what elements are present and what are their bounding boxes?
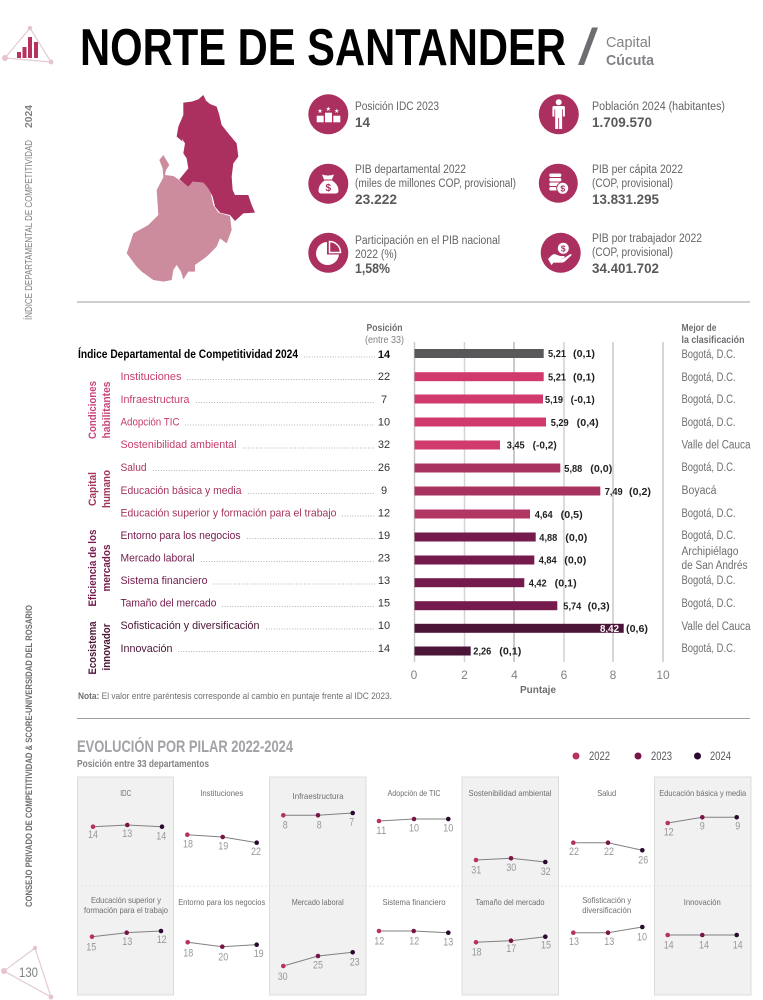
small multiple: Sofisticación y diversificación (569, 895, 647, 948)
row: Sistema financiero (120, 575, 390, 587)
small multiple: Salud (569, 788, 648, 866)
group label: Condiciones habilitantes (87, 381, 113, 439)
stat: PIB departamental: (miles de millones COP, provisional) (355, 178, 516, 190)
bar: Educación superior 4,64: 4,64 (535, 510, 553, 521)
icon: hand with coin: $ (561, 244, 566, 254)
row: Innovación: Innovación (120, 643, 172, 655)
bar: Mercado laboral 4,84: 4,84 (539, 556, 557, 566)
row: Sofisticación y diversificación (120, 620, 390, 632)
stat: PIB per cápita: 13.831.295 (592, 191, 659, 207)
bar: Sofisticación y diversificación 8,42: (0,6) (626, 624, 648, 635)
stat: Posición IDC 2023 (308, 94, 439, 134)
stat: Participación en el PIB nacional: 1,58% (355, 260, 390, 276)
legend: 2023 (651, 751, 672, 763)
row: Sofisticación y diversificación: Sofisticación y diversificación (120, 620, 260, 632)
bar: Infraestructura 5,19 (414, 394, 595, 406)
small multiple: Tamaño del mercado: Tamaño del mercado (476, 897, 545, 907)
small multiple: Adopción de TIC: 11 (376, 825, 386, 837)
small multiple: Educación básica y media: 12 (664, 826, 674, 838)
stat: PIB por trabajador: (COP, provisional) (592, 247, 673, 259)
small multiple: Educación básica y media (659, 788, 746, 838)
bar: Salud 5,88 (414, 464, 612, 475)
row: Educación superior y formación para el trabajo: Educación superior y formación para el trabajo (120, 508, 336, 520)
row: Instituciones (120, 371, 390, 383)
small multiple: IDC: 13 (122, 828, 132, 840)
row: Mercado laboral (120, 552, 390, 564)
small multiple: Innovación (664, 897, 743, 951)
bar: Sistema financiero 4,42: 4,42 (529, 578, 547, 590)
axis labels: 0 (411, 668, 418, 682)
bar: Infraestructura 5,19: (-0,1) (571, 395, 595, 406)
bar: Educación básica y media 7,49 (414, 486, 651, 498)
capital (606, 34, 655, 69)
bar: Educación básica y media 7,49: (0,2) (629, 487, 651, 498)
bar: Instituciones 5,21: (0,1) (573, 372, 595, 384)
bar: Innovación 2,26: 2,26 (473, 646, 492, 658)
axis labels (411, 668, 670, 682)
group label: Eficiencia de los mercados: Eficiencia de los (87, 530, 99, 606)
small multiple: Educación superior y formación para el trabajo: formación para el trabajo (84, 905, 168, 915)
column: mejor de la clasificación (682, 323, 751, 655)
group label: Ecosistema innovador: innovador (101, 623, 113, 670)
row: Índice Departamental de Competitividad: 14 (378, 349, 391, 361)
sidebar: publisher: CONSEJO PRIVADO DE COMPETITIVIDAD & SCORE-UNIVERSIDAD DEL ROSARIO (24, 605, 35, 907)
axis labels: 8 (610, 668, 617, 682)
small multiple: Mercado laboral (278, 897, 360, 983)
bar: Salud 5,88: (0,0) (590, 464, 612, 475)
small multiple: Sostenibilidad ambiental: 31 (471, 864, 481, 876)
small multiple: Entorno para los negocios: Entorno para los negocios (178, 897, 265, 907)
small multiple: Tamaño del mercado: 15 (541, 939, 551, 951)
stat: PIB per cápita: PIB per cápita 2022 (592, 164, 683, 176)
stat: PIB departamental: 23.222 (355, 191, 397, 207)
column: mejor de la clasificación: Boyacá (682, 485, 717, 497)
stat: Participación en el PIB nacional (308, 233, 500, 276)
column: mejor de la clasificación: Bogotá, D.C. (682, 462, 736, 474)
small multiple: Adopción de TIC (376, 788, 453, 837)
column: mejor de la clasificación: Bogotá, D.C. (682, 394, 736, 406)
bar: IDC 5,21: (0,1) (573, 349, 595, 360)
bar: Entorno para los negocios 4,88: 4,88 (539, 533, 558, 544)
bar: Sostenibilidad ambiental 3,45 (414, 440, 557, 452)
small multiple: Mercado laboral: Mercado laboral (292, 897, 344, 907)
small multiple: Educación superior y formación para el trabajo: 13 (122, 936, 132, 948)
row: Tamaño del mercado: Tamaño del mercado (120, 598, 216, 610)
bar: Mercado laboral 4,84: (0,0) (564, 556, 586, 566)
stat: Población 2024 (539, 94, 725, 134)
map: department location (127, 95, 255, 282)
small multiple: Sistema financiero: Sistema financiero (382, 897, 446, 907)
small multiple: Innovación: 14 (733, 939, 743, 951)
bar: Innovación 2,26 (414, 646, 521, 658)
row: Índice Departamental de Competitividad: Índice Departamental de Competitividad 2024 (78, 348, 299, 361)
small multiple: Infraestructura: 8 (283, 819, 288, 831)
bar: Sistema financiero 4,42: (0,1) (555, 578, 577, 590)
small multiple: Instituciones: 18 (183, 839, 193, 851)
column: mejor de la clasificación: Bogotá, D.C. (682, 643, 736, 655)
bar: Educación superior 4,64: (0,5) (561, 510, 583, 521)
stat: PIB departamental: PIB departamental 2022 (355, 164, 466, 176)
small multiple: Educación superior y formación para el trabajo: Educación superior y (91, 895, 162, 905)
bar: Innovación 2,26: (0,1) (499, 646, 521, 658)
small multiple: Sostenibilidad ambiental: Sostenibilidad ambiental (468, 788, 552, 798)
bar: Entorno para los negocios 4,88: (0,0) (565, 533, 587, 544)
small multiple: Sofisticación y diversificación: Sofisticación y (582, 895, 632, 905)
small multiple: Sistema financiero (374, 897, 453, 948)
icon: coins: $ (560, 184, 565, 194)
stat: Participación en el PIB nacional: 2022 (%) (355, 249, 397, 261)
bar: Educación básica y media 7,49: 7,49 (605, 487, 623, 498)
column heading: Posición: (entre 33) (365, 335, 404, 346)
small multiple: Infraestructura: 8 (317, 819, 322, 831)
icon: coins (539, 164, 578, 203)
row: Instituciones: 22 (378, 371, 390, 383)
small multiple: Instituciones: 22 (251, 846, 261, 858)
stat: Posición IDC 2023: 14 (355, 114, 370, 130)
stat: PIB por trabajador: 34.401.702 (592, 260, 659, 276)
bar: Sistema financiero 4,42 (414, 578, 577, 590)
stat: Población 2024: 1.709.570 (592, 114, 652, 130)
small multiple: Instituciones: 19 (218, 841, 228, 853)
axis labels: 4 (511, 668, 518, 682)
row: Infraestructura: 7 (381, 394, 387, 406)
bar chart: puntaje por pilar (411, 342, 670, 696)
column: mejor de la clasificación: Bogotá, D.C. (682, 349, 736, 361)
small multiple: Mercado laboral: 25 (313, 960, 323, 972)
legend: 2022 (589, 751, 610, 763)
row: Entorno para los negocios: 19 (378, 530, 390, 542)
icon: person (539, 94, 579, 134)
small multiple: Educación básica y media: 9 (700, 821, 705, 833)
group label: Condiciones habilitantes: habilitantes (101, 382, 113, 438)
bar: Tamaño del mercado 5,74: (0,3) (588, 602, 610, 612)
bar: Infraestructura 5,19: 5,19 (545, 395, 563, 406)
row: Salud: Salud (120, 462, 146, 474)
column: mejor de la clasificación: Bogotá, D.C. (682, 372, 736, 384)
icon: podium (308, 94, 348, 134)
small multiple: Sofisticación y diversificación: diversificación (582, 905, 631, 915)
small multiple: Tamaño del mercado (472, 897, 551, 959)
column heading: Posición (365, 323, 404, 346)
small multiple: Instituciones: Instituciones (200, 788, 243, 798)
axis labels: 10 (656, 668, 670, 682)
bar: Adopción TIC 5,29: 5,29 (551, 418, 569, 429)
group label: Eficiencia de los mercados (87, 530, 113, 606)
row: Tamaño del mercado: 15 (378, 598, 390, 610)
sidebar: index name and year: 2024 (24, 105, 35, 128)
icon: hand with coin (541, 233, 581, 273)
bar: Mercado laboral 4,84 (414, 556, 586, 566)
bar: Sofisticación y diversificación 8,42: 8,42 (600, 624, 619, 635)
panel: ranking table (78, 323, 404, 674)
row: Sistema financiero: Sistema financiero (120, 575, 208, 587)
bar: IDC 5,21 (414, 349, 595, 360)
legend (572, 751, 731, 763)
page number triangle (1, 946, 53, 999)
bar: Instituciones 5,21: 5,21 (548, 372, 566, 384)
column: mejor de la clasificación: Bogotá, D.C. (682, 530, 736, 542)
bar: Adopción TIC 5,29: (0,4) (577, 418, 599, 429)
row: Sostenibilidad ambiental: Sostenibilidad ambiental (120, 439, 236, 451)
icon: logo triangle with bars (2, 26, 53, 64)
bar: Educación superior 4,64 (414, 510, 583, 521)
row: Sofisticación y diversificación: 10 (378, 620, 390, 632)
column: mejor de la clasificación: Archipiélago (682, 546, 738, 558)
row: Innovación (120, 643, 390, 655)
row: Educación básica y media (120, 485, 387, 497)
section heading: EVOLUCIÓN POR PILAR 2022-2024 (77, 737, 293, 756)
icon: pie chart (308, 233, 348, 273)
row: Entorno para los negocios (120, 530, 390, 542)
small multiple: Innovación: 14 (699, 939, 709, 951)
small multiple: Adopción de TIC: 10 (409, 823, 419, 835)
group label: Eficiencia de los mercados: mercados (101, 544, 113, 592)
small multiple: Sistema financiero: 12 (374, 935, 384, 947)
bar: Sofisticación y diversificación 8,42 (414, 624, 648, 635)
bar: Entorno para los negocios 4,88 (414, 532, 587, 544)
small multiple: Educación superior y formación para el trabajo (84, 895, 168, 954)
small multiple: Sistema financiero: 12 (409, 935, 419, 947)
small multiple: Sostenibilidad ambiental: 32 (541, 866, 551, 878)
stat: PIB per cápita: (COP, provisional) (592, 178, 673, 190)
axis labels: 2 (461, 668, 468, 682)
group label: Capital humano: humano (101, 470, 113, 508)
row: Salud (120, 462, 390, 474)
small multiple: Innovación: Innovación (684, 897, 721, 907)
map: neighbouring area (127, 155, 232, 282)
row: Mercado laboral: 23 (378, 552, 390, 564)
sidebar: index name and year: ÍNDICE DEPARTAMENTAL DE COMPETITIVIDAD (22, 140, 35, 320)
icon: money bag (308, 164, 348, 204)
row: Tamaño del mercado (120, 598, 390, 610)
small multiple: Educación básica y media: 9 (735, 821, 740, 833)
row: Instituciones: Instituciones (120, 371, 182, 383)
map: Norte de Santander (177, 95, 255, 221)
column: mejor de la clasificación: Bogotá, D.C. (682, 575, 736, 587)
bar: Tamaño del mercado 5,74: 5,74 (563, 602, 582, 612)
page number triangle: 130 (19, 964, 38, 980)
small multiple: Adopción de TIC: Adopción de TIC (388, 788, 440, 798)
small multiple: Sostenibilidad ambiental: 30 (506, 862, 516, 874)
note: Nota: El valor entre paréntesis corresponde al cambio en puntaje frente al IDC 2023. (78, 691, 392, 702)
small multiple: Sistema financiero: 13 (443, 936, 453, 948)
column: mejor de la clasificación: Valle del Cauca (682, 621, 751, 633)
row: Salud: 26 (378, 462, 390, 474)
small multiple: Sostenibilidad ambiental (468, 788, 552, 878)
row: Sistema financiero: 13 (378, 575, 390, 587)
small multiple: Mercado laboral: 30 (278, 971, 288, 983)
bar: Sostenibilidad ambiental 3,45: (-0,2) (533, 440, 557, 452)
bar: Tamaño del mercado 5,74 (414, 601, 610, 612)
small multiple: Educación superior y formación para el trabajo: 12 (157, 934, 167, 946)
small multiple: Infraestructura: Infraestructura (292, 791, 344, 801)
small multiple: Salud: Salud (597, 788, 616, 798)
row: Adopción TIC (120, 416, 390, 428)
bar: Salud 5,88: 5,88 (564, 464, 583, 475)
small multiple: IDC: IDC (120, 788, 131, 798)
stat: PIB per cápita (539, 164, 683, 207)
group label: Condiciones habilitantes: Condiciones (87, 381, 99, 439)
row: Adopción TIC: Adopción TIC (120, 416, 180, 428)
row: Educación básica y media: Educación básica y media (120, 485, 242, 497)
column: mejor de la clasificación: Valle del Cauca (682, 440, 751, 452)
small multiple: Salud: 22 (604, 846, 614, 858)
bar: Instituciones 5,21 (414, 372, 595, 384)
small multiple: Entorno para los negocios: 20 (218, 951, 228, 963)
column: mejor de la clasificación: Bogotá, D.C. (682, 417, 736, 429)
group label: Ecosistema innovador: Ecosistema (87, 621, 99, 674)
stat: Población 2024: Población 2024 (habitantes) (592, 101, 725, 113)
bar: IDC 5,21: 5,21 (548, 349, 566, 360)
small multiple: Innovación: 14 (664, 939, 674, 951)
title: NORTE DE SANTANDER (80, 19, 566, 77)
small multiple: Sofisticación y diversificación: 13 (604, 936, 614, 948)
stat: PIB departamental (308, 164, 516, 207)
stat: PIB por trabajador (541, 233, 702, 276)
small multiple: Entorno para los negocios: 19 (254, 948, 264, 960)
row: Educación superior y formación para el trabajo: 12 (378, 508, 390, 520)
stat: PIB por trabajador: PIB por trabajador 2022 (592, 233, 702, 245)
column heading (682, 323, 744, 346)
group label: Capital humano: Capital (87, 472, 99, 506)
row: Entorno para los negocios: Entorno para los negocios (120, 530, 241, 542)
group label: Ecosistema innovador (87, 621, 113, 674)
small multiple: Adopción de TIC: 10 (443, 823, 453, 835)
section subheading: Posición entre 33 departamentos (77, 759, 209, 770)
icon: money bag: $ (326, 183, 332, 194)
row: Infraestructura (120, 394, 387, 406)
capital: Capital (606, 34, 651, 51)
row: Mercado laboral: Mercado laboral (120, 552, 194, 564)
column heading: la clasificación (682, 335, 744, 346)
column: mejor de la clasificación: Bogotá, D.C. (682, 508, 736, 520)
small multiple: Infraestructura: 7 (349, 817, 354, 829)
row: Sostenibilidad ambiental: 32 (378, 439, 390, 451)
stat: Posición IDC 2023: Posición IDC 2023 (355, 101, 439, 113)
small multiple: Educación superior y formación para el trabajo: 15 (86, 942, 96, 954)
stat: Participación en el PIB nacional: Participación en el PIB nacional (355, 235, 500, 247)
small multiple: Tamaño del mercado: 17 (506, 943, 516, 955)
small multiple: Sofisticación y diversificación: 13 (569, 936, 579, 948)
row: Sostenibilidad ambiental (120, 439, 390, 451)
title slash (578, 28, 598, 65)
legend: 2024 (710, 751, 731, 763)
small multiple: Salud: 26 (638, 854, 648, 866)
row: Adopción TIC: 10 (378, 416, 390, 428)
bar: Sostenibilidad ambiental 3,45: 3,45 (507, 440, 525, 452)
axis labels: 6 (561, 668, 568, 682)
column: mejor de la clasificación: de San Andrés (682, 560, 748, 572)
axis title: Puntaje (520, 684, 556, 696)
small multiple: Mercado laboral: 23 (350, 956, 360, 968)
small multiple: Tamaño del mercado: 18 (472, 947, 482, 959)
capital: Cúcuta (606, 52, 655, 69)
small multiple: IDC: 14 (156, 830, 166, 842)
column heading: Posición: Posición (366, 323, 402, 334)
small multiple: Entorno para los negocios (178, 897, 265, 963)
row: Infraestructura: Infraestructura (120, 394, 190, 406)
group label: Capital humano (87, 470, 113, 508)
small multiple: Entorno para los negocios: 18 (183, 948, 193, 960)
small multiple: Instituciones (183, 788, 261, 858)
column: mejor de la clasificación: Bogotá, D.C. (682, 598, 736, 610)
row: Innovación: 14 (378, 643, 390, 655)
row: Educación básica y media: 9 (381, 485, 387, 497)
small multiple: Salud: 22 (569, 846, 579, 858)
small multiple: IDC: 14 (88, 829, 98, 841)
small multiple: IDC (88, 788, 166, 842)
small multiple: Infraestructura (281, 791, 355, 831)
column heading: Mejor de (682, 323, 717, 334)
small multiple: Sofisticación y diversificación: 10 (637, 932, 647, 944)
bar: Adopción TIC 5,29 (414, 418, 599, 429)
small multiple: Educación básica y media: Educación básica y media (659, 788, 746, 798)
